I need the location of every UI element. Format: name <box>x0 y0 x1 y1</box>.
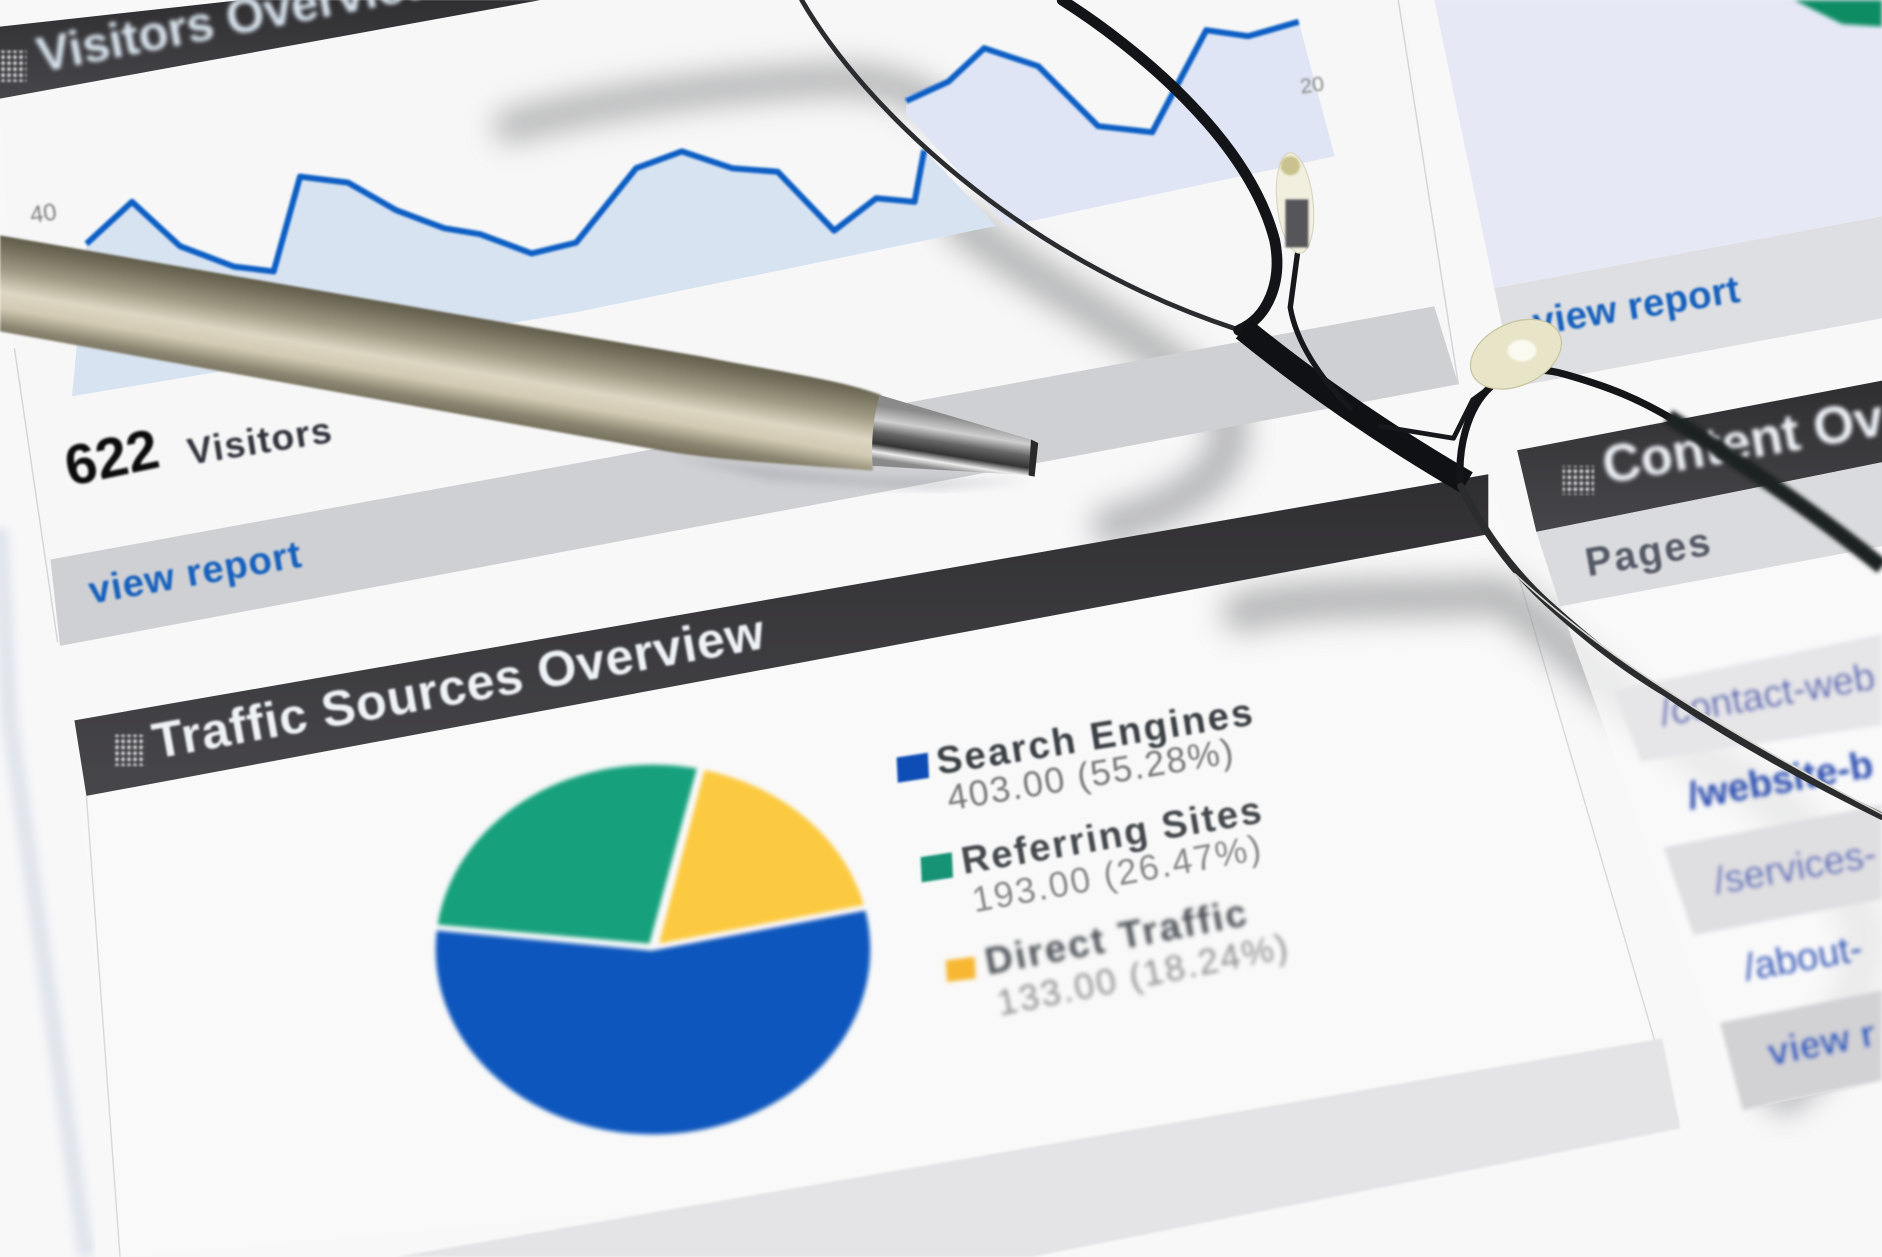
right lens lower rim <box>1461 486 1882 816</box>
slice: search engines <box>432 908 874 1138</box>
panel edge lines <box>14 0 1458 642</box>
bridge wire right <box>1380 387 1491 438</box>
right lens rim blurred end <box>1668 417 1882 567</box>
label: Pages: Pages <box>1582 520 1714 585</box>
panel: right top card <box>1434 0 1882 288</box>
right lens top rim <box>1460 370 1674 486</box>
map corner green <box>1794 0 1882 27</box>
panel: traffic sources card <box>74 474 1678 1257</box>
link: view report right: view report <box>1530 268 1743 344</box>
chart line <box>86 150 924 271</box>
table rows: /website-b <box>1684 743 1876 818</box>
bridge <box>1243 329 1467 483</box>
pen tip <box>872 395 1035 475</box>
legend item: referring sites: 193.00 (26.47%) <box>969 827 1264 920</box>
heading: Traffic Sources Overview: Traffic Sources Overview <box>148 602 769 770</box>
chart: traffic pie <box>432 761 874 1138</box>
icon: header grid <box>114 735 145 766</box>
axis label 40: 40 <box>28 199 58 229</box>
label Visitors: Visitors <box>184 408 334 473</box>
rim highlight <box>1515 574 1882 814</box>
icon: visitors header grid <box>0 51 26 82</box>
panel: visitors chart card <box>0 0 1458 646</box>
header: traffic sources overview <box>74 474 1488 796</box>
shadow: glasses shadows on paper <box>510 79 1868 1094</box>
table rows: view r <box>1764 1012 1879 1075</box>
table header band <box>1536 462 1882 606</box>
band: view report right <box>1494 216 1882 387</box>
chart: visitors area line <box>28 150 996 396</box>
left lens outer rim <box>802 0 1236 329</box>
nose pad left <box>1272 151 1318 255</box>
chart: magnified line through lens <box>906 22 1335 226</box>
link: view report: view report <box>85 533 305 613</box>
card edges <box>86 571 1678 1257</box>
panel: content overview <box>1517 359 1882 1110</box>
legend item: search engines <box>897 691 1255 818</box>
legend item: direct traffic: 133.00 (18.24%) <box>993 925 1291 1023</box>
legend: traffic sources <box>897 691 1291 1023</box>
number 622: 622 <box>59 417 164 498</box>
legend item: direct traffic: Direct Traffic <box>981 892 1250 984</box>
table rows: /contact-web <box>1656 655 1878 735</box>
table rows: /about- <box>1740 927 1866 990</box>
pen barrel <box>0 235 881 471</box>
left blue edge <box>0 528 86 1257</box>
nose pad right <box>1459 306 1573 403</box>
left lens inner rim <box>1062 0 1277 330</box>
table rows: /services- <box>1710 832 1880 903</box>
icon: glasses <box>802 0 1882 816</box>
slice: direct traffic <box>656 767 866 949</box>
legend item: referring sites: Referring Sites <box>958 789 1265 883</box>
slice: referring sites <box>434 761 700 947</box>
header: content overview <box>1517 381 1882 532</box>
legend item: referring sites <box>921 789 1265 920</box>
axis label 20: 20 <box>1298 71 1326 99</box>
shadow: pen <box>672 456 1032 490</box>
panel: bottom band of traffic card <box>396 1038 1680 1257</box>
icon: pen <box>0 235 1038 477</box>
band: view report <box>50 306 1458 646</box>
pen nib end <box>1029 439 1038 477</box>
header: visitors overview <box>0 0 540 99</box>
legend item: search engines: 403.00 (55.28%) <box>944 730 1236 818</box>
legend item: direct traffic <box>946 892 1291 1023</box>
legend item: search engines: Search Engines <box>933 691 1255 783</box>
table rows <box>1614 634 1882 1110</box>
icon: content header grid <box>1563 466 1594 495</box>
stat: 622 visitors <box>59 408 334 498</box>
bridge wire left <box>1290 253 1350 408</box>
chart area fill <box>72 150 996 396</box>
